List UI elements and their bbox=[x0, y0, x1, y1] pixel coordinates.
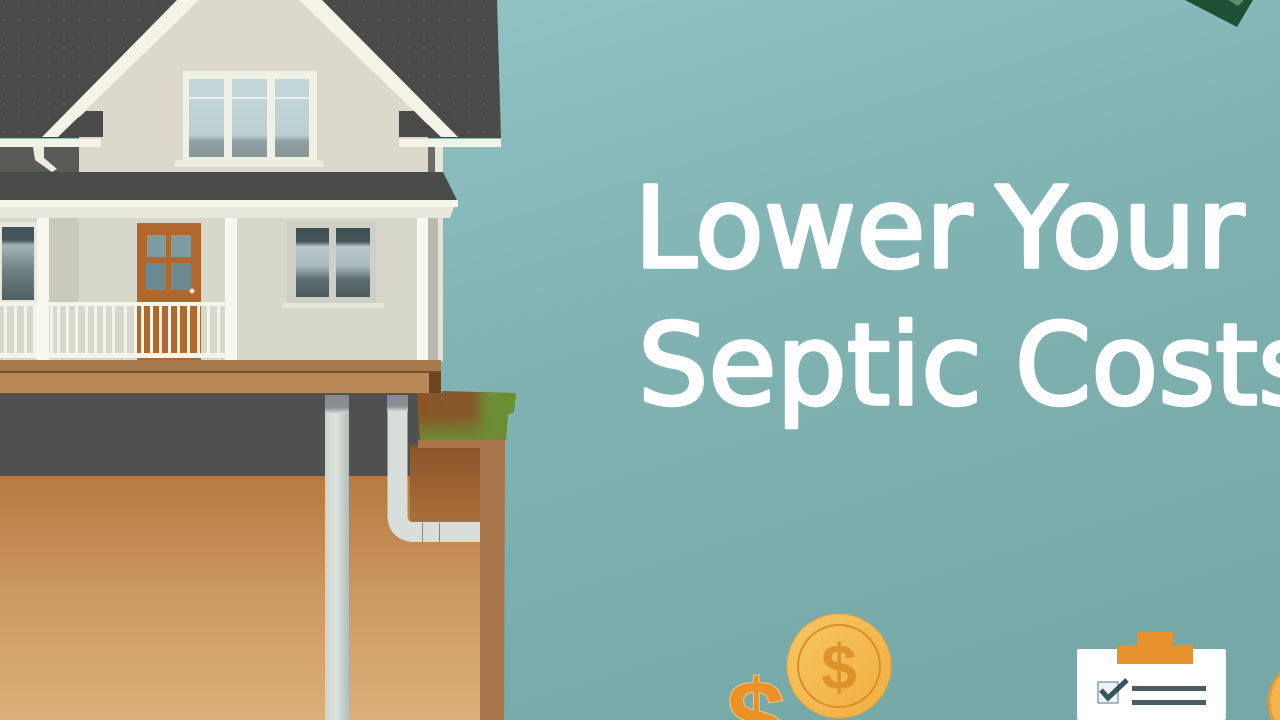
title word: Lower: Lower bbox=[634, 164, 973, 294]
retaining edge bbox=[418, 440, 505, 720]
icon: gold coin: $ bbox=[821, 631, 857, 703]
right porch window bbox=[282, 222, 384, 308]
title word: Septic: Septic bbox=[638, 301, 982, 431]
upper earth block bbox=[410, 445, 482, 525]
main vertical pipe bbox=[325, 395, 349, 720]
title word: Your: Your bbox=[995, 164, 1245, 294]
left roof return bbox=[58, 111, 103, 137]
crawl space bbox=[0, 393, 420, 476]
right roof return bbox=[399, 111, 440, 137]
porch posts bbox=[37, 218, 428, 361]
grass and topsoil bbox=[417, 391, 516, 440]
right bargeboard bbox=[299, 0, 458, 137]
left bargeboard bbox=[42, 0, 199, 137]
porch fascia bbox=[0, 200, 458, 218]
left porch window bbox=[0, 222, 37, 302]
title bbox=[634, 164, 1280, 431]
left eave bbox=[0, 139, 101, 147]
right corner trim bbox=[428, 147, 443, 172]
house illustration bbox=[0, 0, 516, 720]
upper window bbox=[175, 71, 323, 167]
downspout bbox=[33, 147, 57, 172]
right wall edge bbox=[427, 218, 443, 361]
right eave bbox=[399, 139, 501, 147]
deck bbox=[0, 360, 441, 393]
gable wall bbox=[79, 0, 428, 172]
drain pipe with elbow bbox=[387, 395, 480, 542]
recessed wall shade bbox=[49, 218, 79, 302]
lower wall bbox=[0, 218, 441, 361]
icon: partial coin bbox=[1269, 661, 1280, 720]
lower roof bbox=[0, 172, 457, 200]
porch railing bbox=[0, 302, 226, 358]
icon: clipboard checklist bbox=[1077, 632, 1226, 720]
upper roof bbox=[0, 0, 501, 138]
front door bbox=[137, 223, 201, 360]
soil bbox=[0, 476, 482, 720]
left lower wall shadow bbox=[0, 147, 79, 172]
icon: green banknote corner bbox=[1185, 0, 1253, 27]
icon: gold coin bbox=[787, 614, 891, 718]
